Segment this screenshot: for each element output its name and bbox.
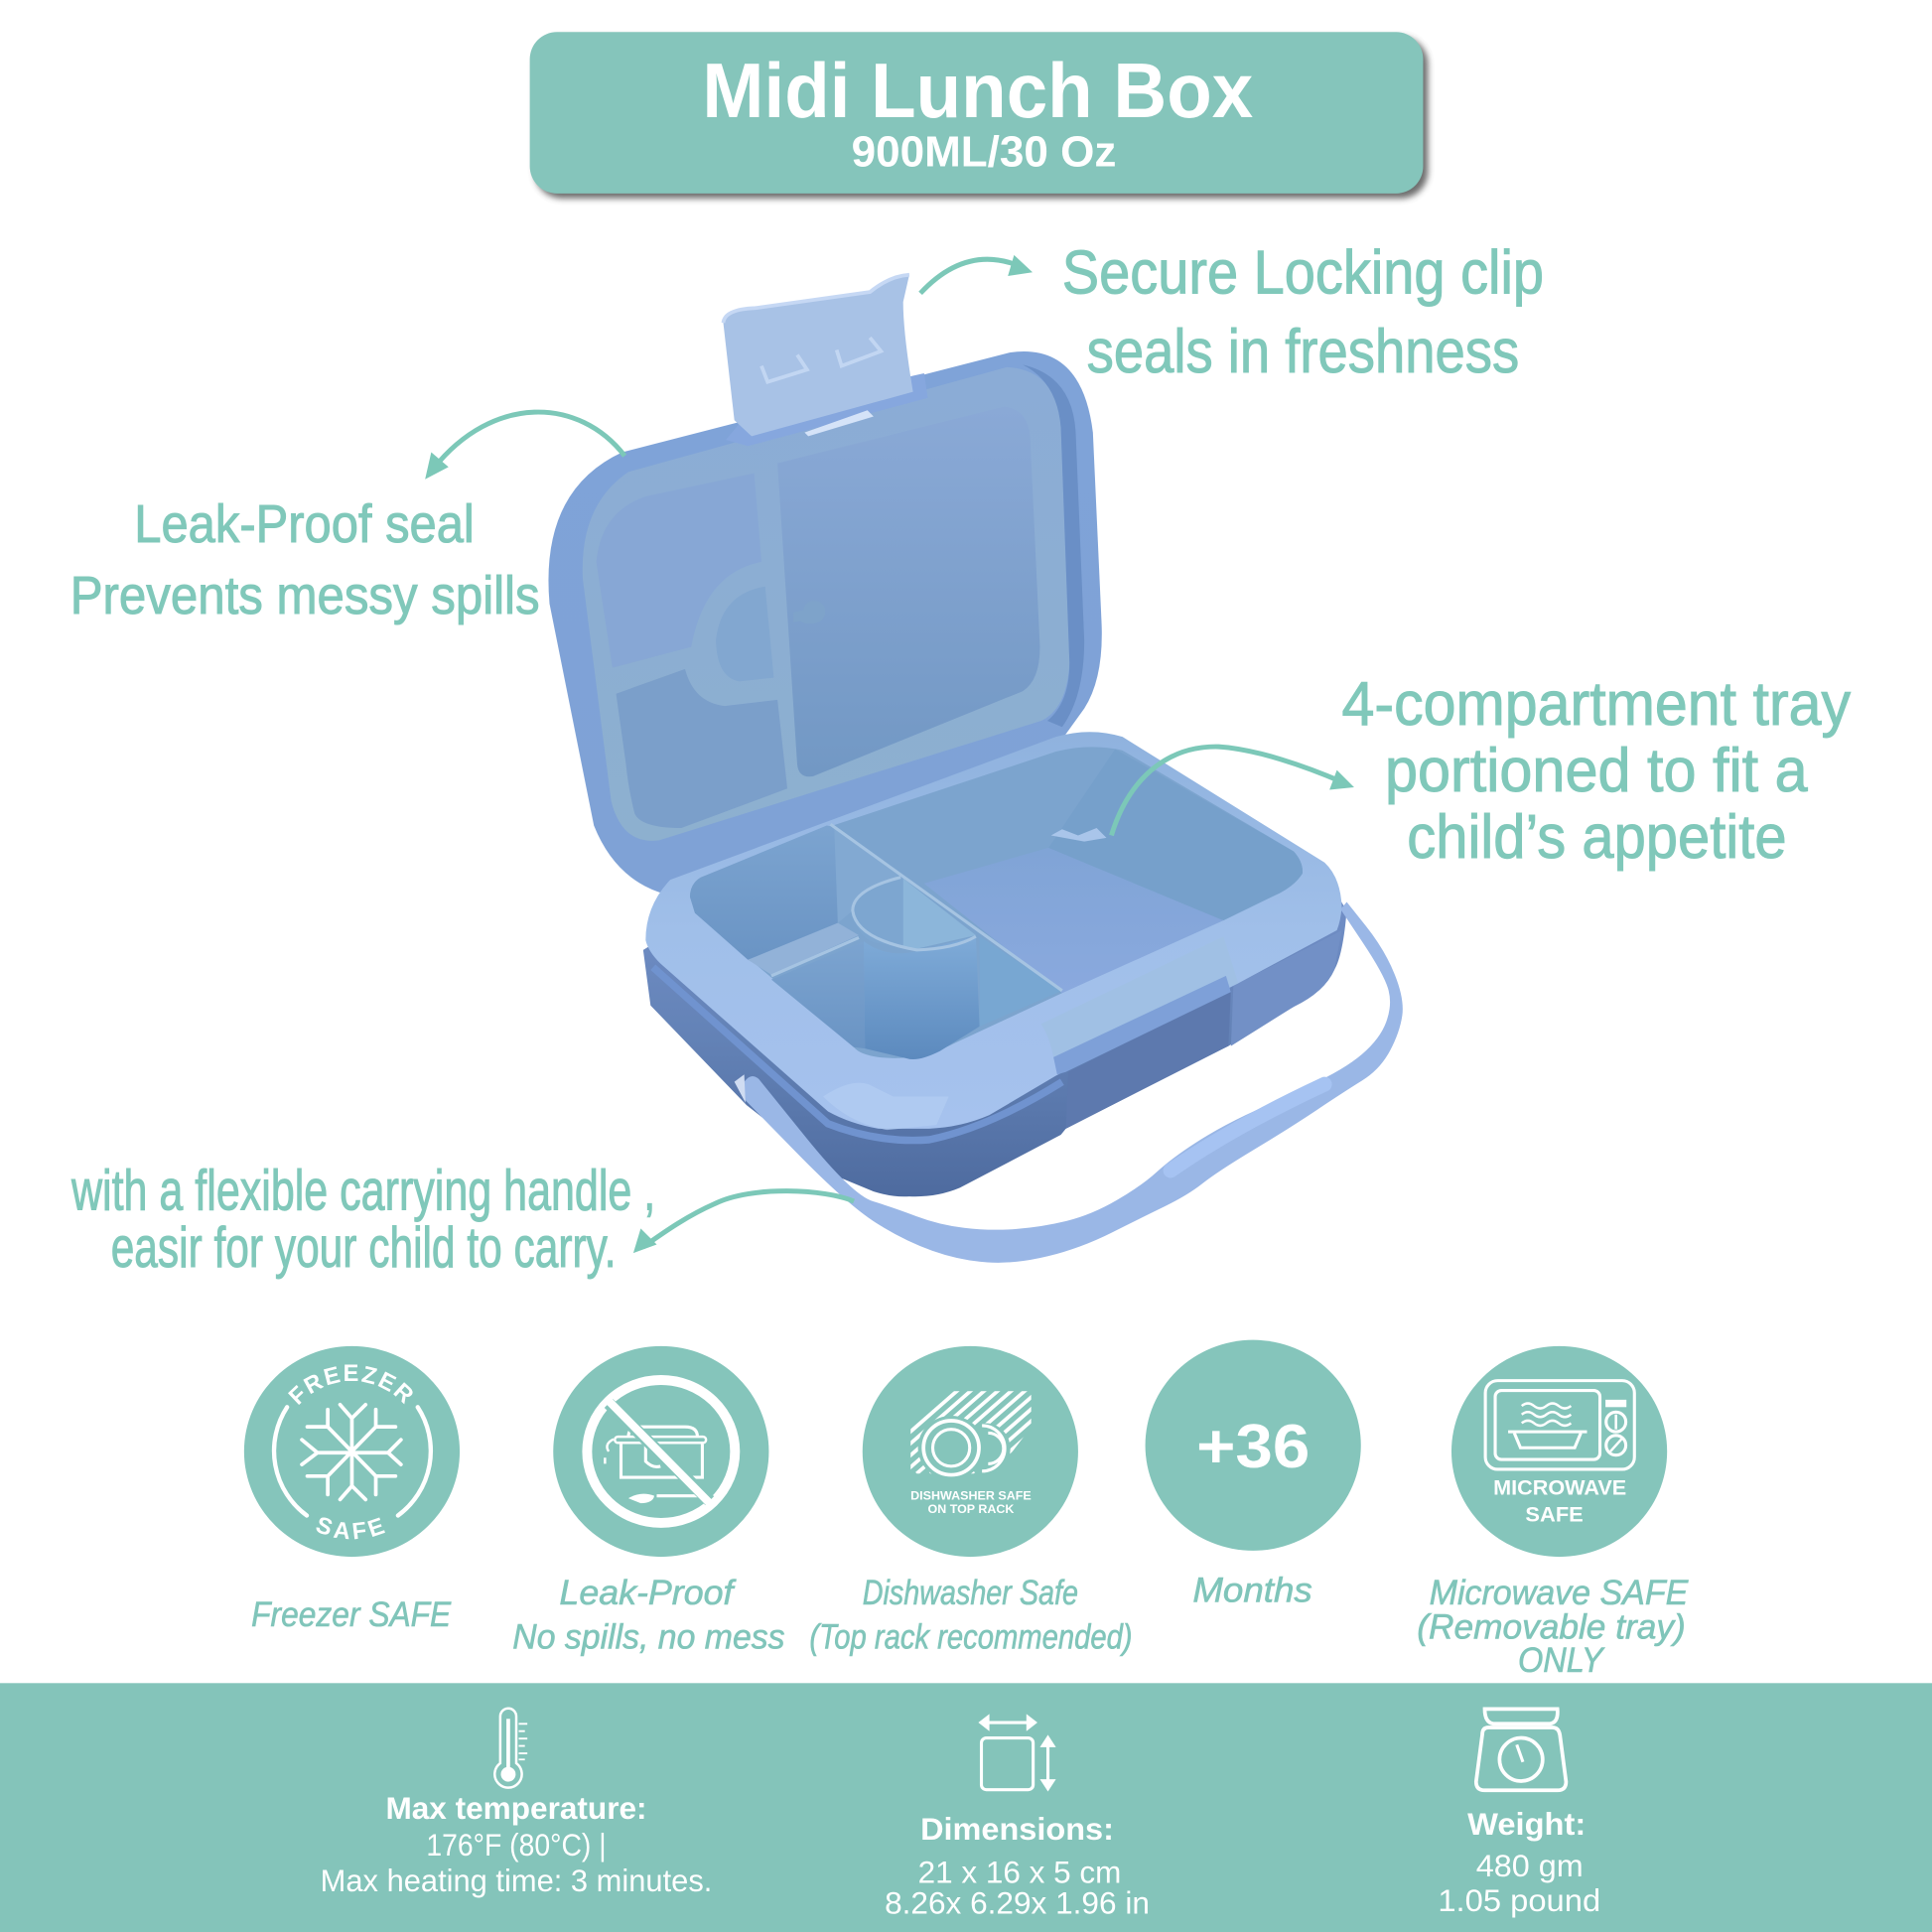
callout: secure locking clip: seals in freshness: [1087, 318, 1519, 386]
spec: dimensions: Dimensions:: [920, 1812, 1114, 1847]
callout: carrying handle: with a flexible carrying handle ,: [70, 1160, 655, 1223]
badge: freezer safe: SAFE: [316, 1517, 385, 1539]
badge: +36 months: +36: [1196, 1413, 1310, 1481]
spec: max temperature: 176°F (80°C) |: [426, 1828, 607, 1863]
badge: freezer safe: FREEZER: [288, 1364, 413, 1405]
badge: dishwasher safe: DISHWASHER SAFE: [910, 1489, 1032, 1502]
spec: dimensions: [885, 1812, 1150, 1920]
badge: dishwasher safe: ON TOP RACK: [928, 1503, 1015, 1516]
caption: dishwasher safe: [809, 1575, 1133, 1657]
product photo: lunch box: [548, 275, 1403, 1263]
callout: secure locking clip: [1062, 238, 1544, 386]
caption: microwave safe: [1417, 1575, 1689, 1680]
caption: dishwasher safe: (Top rack recommended): [809, 1619, 1133, 1657]
caption: leak-proof: No spills, no mess: [512, 1619, 785, 1657]
icon: dimensions: [978, 1714, 1056, 1792]
icon: microwave: [1485, 1381, 1634, 1469]
base lip: [653, 967, 1062, 1141]
badge: +36 months: [1146, 1340, 1361, 1551]
caption: freezer safe: Freezer SAFE: [251, 1596, 452, 1634]
rim clip details: [1041, 936, 1238, 1057]
open lid: [548, 351, 1102, 899]
title text: Midi Lunch Box: [702, 47, 1253, 134]
badge: microwave safe: SAFE: [1525, 1504, 1584, 1527]
caption: microwave safe: (Removable tray): [1417, 1609, 1686, 1647]
spec: dimensions: 8.26x 6.29x 1.96 in: [885, 1885, 1150, 1920]
spec: weight: [1438, 1807, 1600, 1918]
tray compartments: [690, 747, 1303, 1059]
callout: compartment tray: portioned to fit a: [1385, 737, 1808, 805]
arrow: handle: [633, 1191, 854, 1253]
callout: carrying handle: easir for your child to carry.: [111, 1216, 617, 1280]
locking clip: [724, 275, 928, 446]
badge: leak-proof: [553, 1346, 768, 1557]
badge: freezer safe: [244, 1346, 460, 1557]
base recessed panel: [1066, 990, 1231, 1129]
icon: snowflake: [302, 1405, 401, 1499]
arrow: compartments: [1111, 747, 1354, 835]
spec: dimensions: 21 x 16 x 5 cm: [918, 1855, 1121, 1889]
spec: max temperature: Max temperature:: [385, 1791, 647, 1826]
tray rim: [645, 732, 1342, 1129]
title banner: [530, 32, 1428, 199]
spec: max temperature: [321, 1791, 712, 1898]
callout: leak-proof seal: [70, 495, 540, 625]
caption: leak-proof: [512, 1575, 785, 1657]
spec: weight: 480 gm: [1476, 1849, 1584, 1883]
callout: compartment tray: [1342, 670, 1851, 872]
caption: dishwasher safe: Dishwasher Safe: [863, 1575, 1078, 1612]
spec: weight: 1.05 pound: [1438, 1883, 1600, 1918]
arrow: leak-proof seal: [425, 412, 624, 480]
callout: secure locking clip: Secure Locking clip: [1062, 238, 1544, 307]
caption: microwave safe: Microwave SAFE: [1430, 1575, 1689, 1612]
icon: kitchen scale: [1476, 1709, 1566, 1790]
icon: thermometer: [494, 1709, 527, 1788]
callout: compartment tray: child’s appetite: [1407, 803, 1787, 872]
caption: leak-proof: Leak-Proof: [559, 1575, 737, 1612]
callout: leak-proof seal: Prevents messy spills: [70, 567, 540, 625]
arrow: locking clip: [920, 255, 1033, 293]
base of box: [643, 801, 1346, 1196]
subtitle capacity: 900ML/30 Oz: [852, 129, 1116, 177]
caption: microwave safe: ONLY: [1518, 1642, 1605, 1680]
badge: microwave safe: MICROWAVE: [1493, 1476, 1626, 1499]
caption: months: Months: [1192, 1572, 1312, 1609]
callout: carrying handle: [70, 1160, 655, 1280]
carrying handle: [735, 901, 1403, 1263]
callout: leak-proof seal: Leak-Proof seal: [134, 495, 475, 554]
panel: specifications band: [0, 1683, 1932, 1932]
spec: weight: Weight:: [1467, 1807, 1586, 1842]
badge: microwave safe: [1451, 1346, 1667, 1557]
badge: dishwasher safe: [863, 1346, 1097, 1557]
callout: compartment tray: 4-compartment tray: [1342, 670, 1851, 739]
spec: max temperature: Max heating time: 3 minutes.: [321, 1863, 712, 1898]
base right panel: [1231, 930, 1342, 1046]
